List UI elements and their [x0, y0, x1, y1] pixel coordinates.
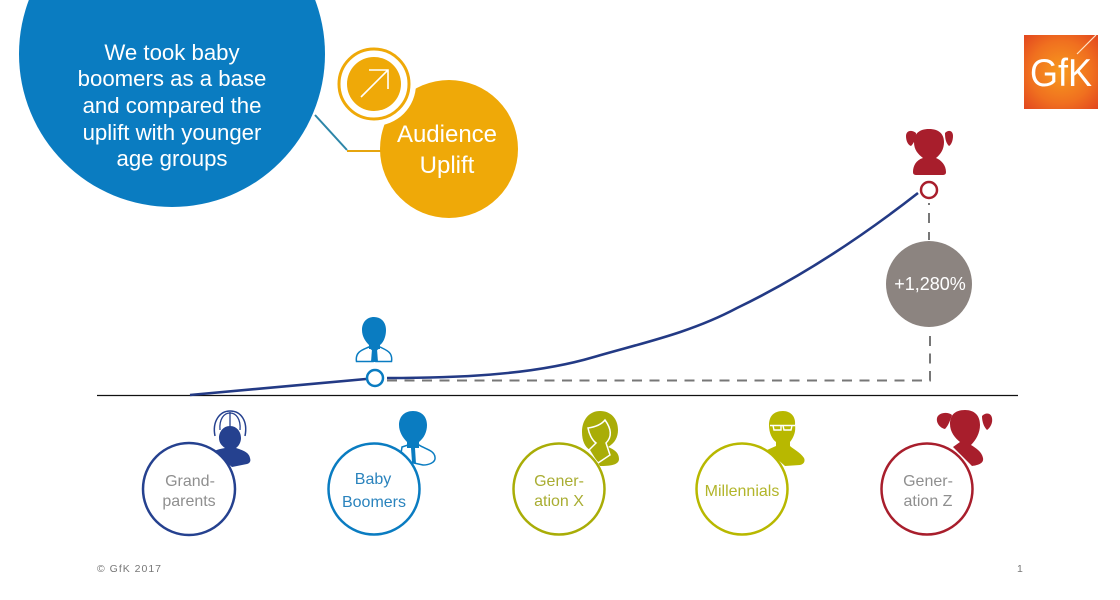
marker: generation Z [921, 182, 937, 198]
intro text: uplift with younger [83, 120, 262, 145]
intro text: age groups [116, 146, 228, 171]
grandparents label: parents [162, 493, 216, 510]
audience uplift label: Uplift [420, 152, 475, 179]
panel: grandparents [143, 411, 250, 535]
audience uplift label: Audience [397, 121, 497, 148]
generation X label: Gener- [534, 473, 584, 490]
icon: grandparent [213, 411, 250, 467]
panel: audience uplift [332, 42, 518, 218]
dashed drop line [928, 203, 930, 240]
baby boomers label: Baby [355, 471, 391, 488]
icon: generation X [582, 411, 619, 466]
callout: +1,280% [886, 241, 972, 327]
panel: intro circle [19, 0, 325, 207]
baseline axis [97, 394, 1018, 396]
dashed reference line [387, 336, 930, 380]
grandparents label: Grand- [165, 473, 215, 490]
generation Z label: Gener- [903, 473, 953, 490]
generation X label: ation X [534, 493, 584, 510]
panel: generation Z [882, 410, 992, 534]
icon: generation Z above chart [906, 129, 953, 175]
icon: millennial [767, 411, 805, 466]
glasses [770, 426, 795, 430]
icon: uplift arrow [339, 49, 409, 119]
millennials label: Millennials [705, 483, 779, 500]
generation Z label: ation Z [904, 493, 953, 510]
panel: baby boomers [328, 411, 435, 534]
panel: generation X [514, 411, 619, 534]
intro text: We took baby [104, 40, 241, 65]
callout: +1,280%: +1,280% [894, 274, 966, 294]
baby boomers label: Boomers [342, 494, 406, 511]
page number: 1 [1017, 563, 1023, 575]
footer copyright: © GfK 2017 [97, 563, 161, 575]
panel: millennials [696, 411, 805, 534]
icon: baby boomer [399, 411, 435, 465]
icon: generation Z [937, 410, 992, 466]
icon: baby boomer above chart [356, 317, 392, 362]
intro text: and compared the [83, 93, 261, 118]
intro text: boomers as a base [78, 66, 266, 91]
connector line [315, 115, 381, 151]
logo: GfK: GfK [1030, 52, 1092, 95]
line chart: audience uplift curve [190, 182, 937, 395]
marker: baby boomers [367, 370, 383, 386]
logo: GfK [1024, 35, 1098, 109]
